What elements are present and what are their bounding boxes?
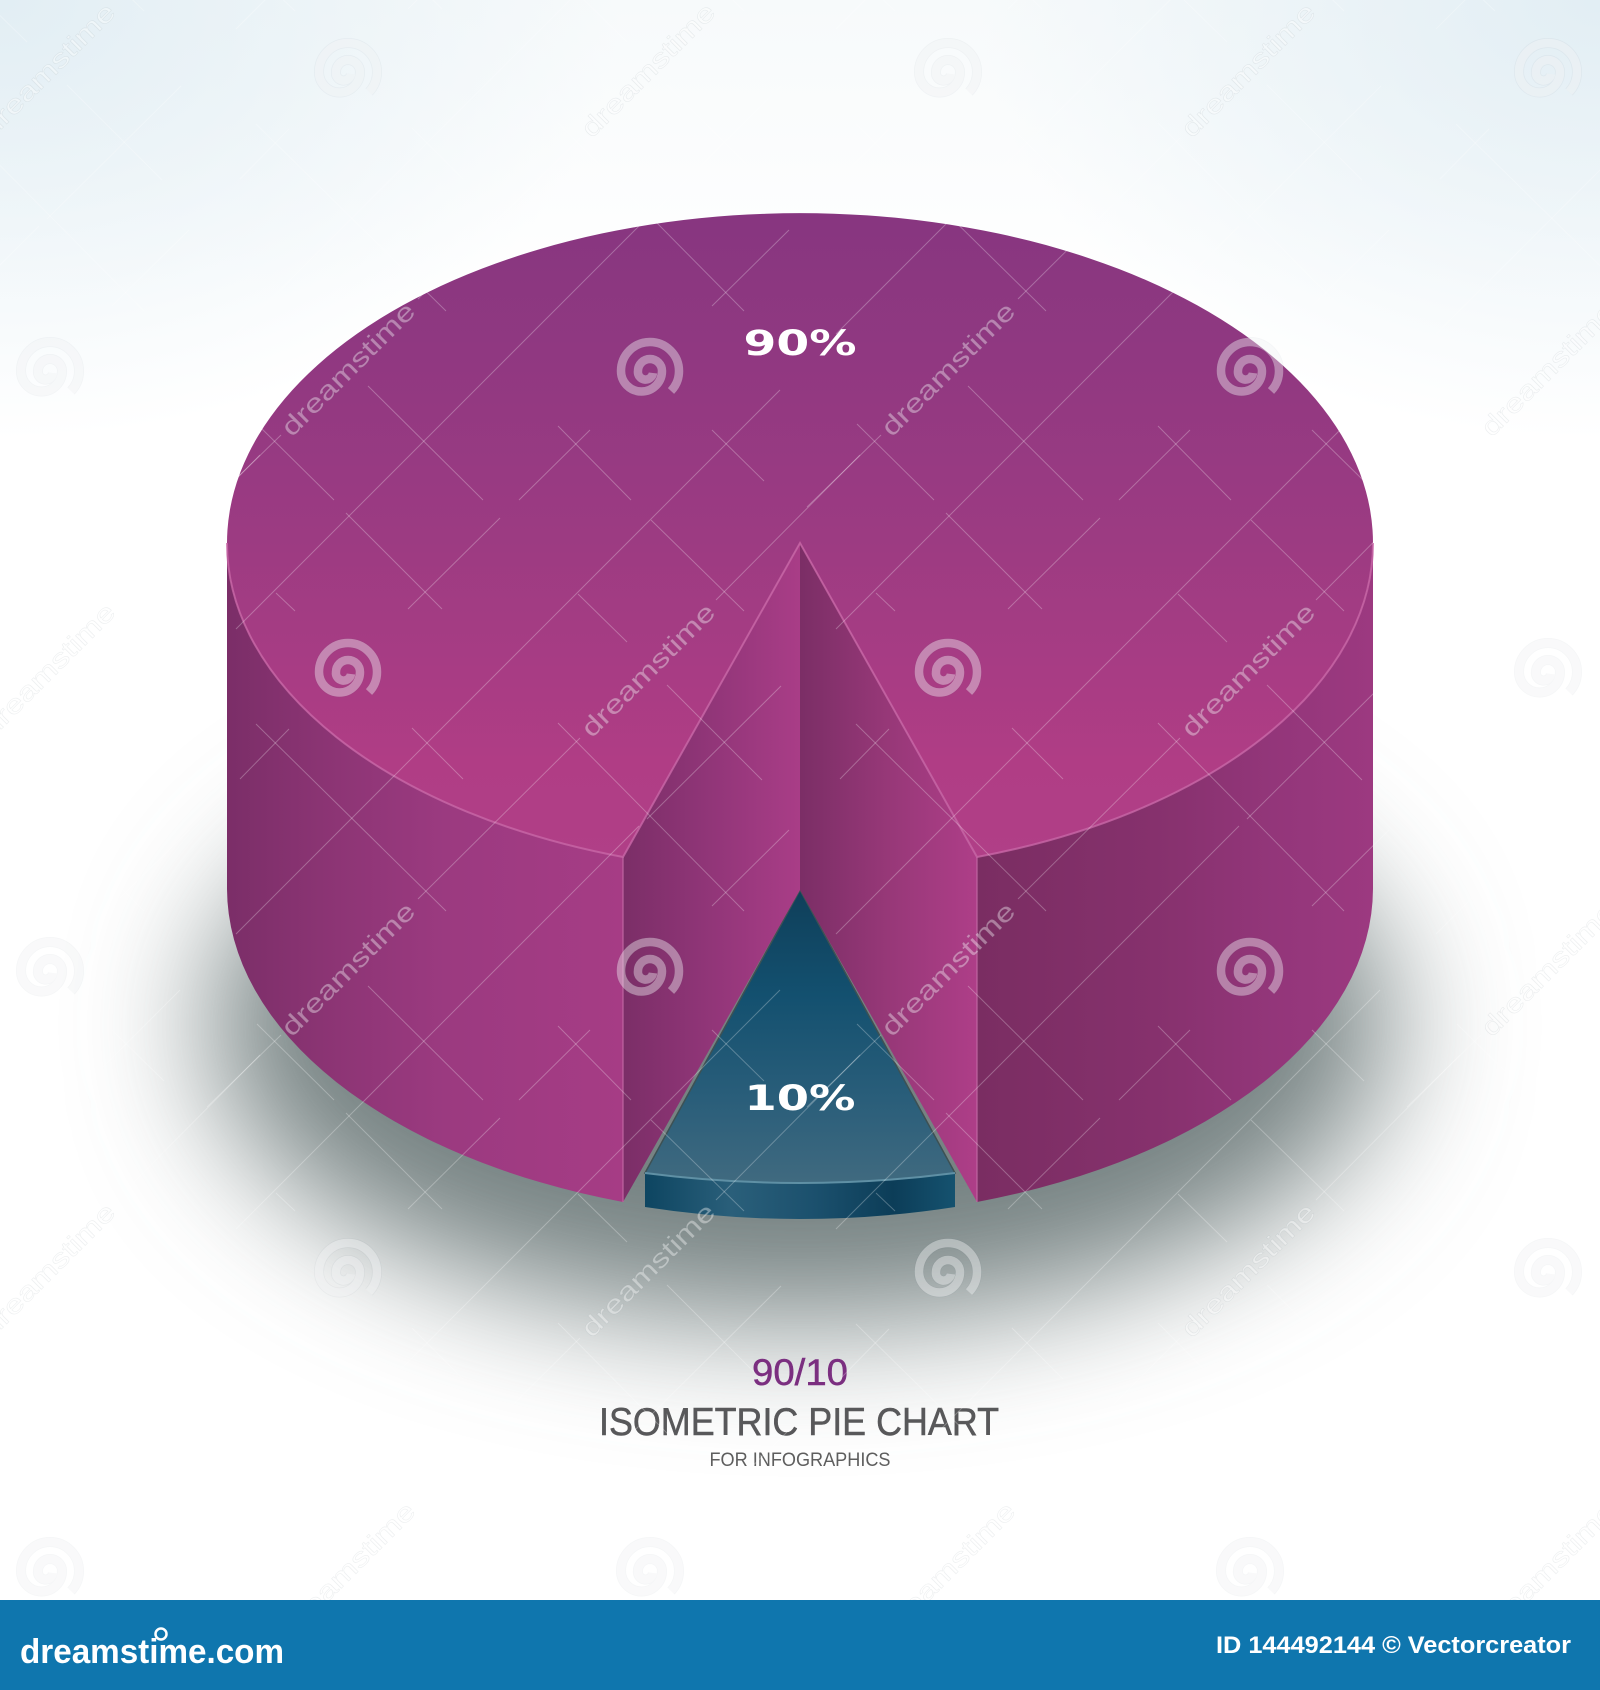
10% slice [645,890,955,1219]
90% slice outer side left [227,543,623,1202]
watermark wordmarks: dreamstime [275,896,421,1042]
watermark wordmarks: dreamstime [875,296,1021,442]
drop shadow under pie [210,730,1390,1320]
watermark wordmarks: dreamstime [575,1197,721,1343]
label 10%: 10% [744,1079,856,1119]
watermark wordmarks: dreamstime [1175,1197,1321,1343]
label 90%: 90% [744,324,856,364]
watermark wordmarks: dreamstime [1475,296,1600,442]
watermark wordmarks: dreamstime [875,896,1021,1042]
watermark wordmarks: dreamstime [1475,896,1600,1042]
main heading: ISOMETRIC PIE CHART [599,1401,999,1444]
watermark wordmarks: dreamstime [1175,0,1321,143]
footer bar [0,1600,1600,1690]
inner wall left [623,543,800,1202]
footer credit: ID 144492144 © Vectorcreator [1216,1632,1571,1659]
watermark wordmarks: dreamstime [1475,1496,1600,1642]
footer logo: dreamstime.com [20,1633,284,1671]
ratio heading: 90/10 [752,1352,848,1393]
inner wall right [800,543,977,1202]
watermark wordmarks: dreamstime [1175,597,1321,743]
watermark wordmarks: dreamstime [275,296,421,442]
90% slice outer side right [977,543,1373,1202]
sub heading: FOR INFOGRAPHICS [710,1450,890,1471]
title block [599,1352,999,1471]
watermark wordmarks: dreamstime [875,1496,1021,1642]
pie chart [227,213,1373,1219]
90% slice top face [227,213,1373,857]
footer logo spiral icon [156,1628,166,1640]
watermark wordmarks: dreamstime [575,0,721,143]
watermark wordmarks: dreamstime [275,1496,421,1642]
watermark wordmarks: dreamstime [575,597,721,743]
